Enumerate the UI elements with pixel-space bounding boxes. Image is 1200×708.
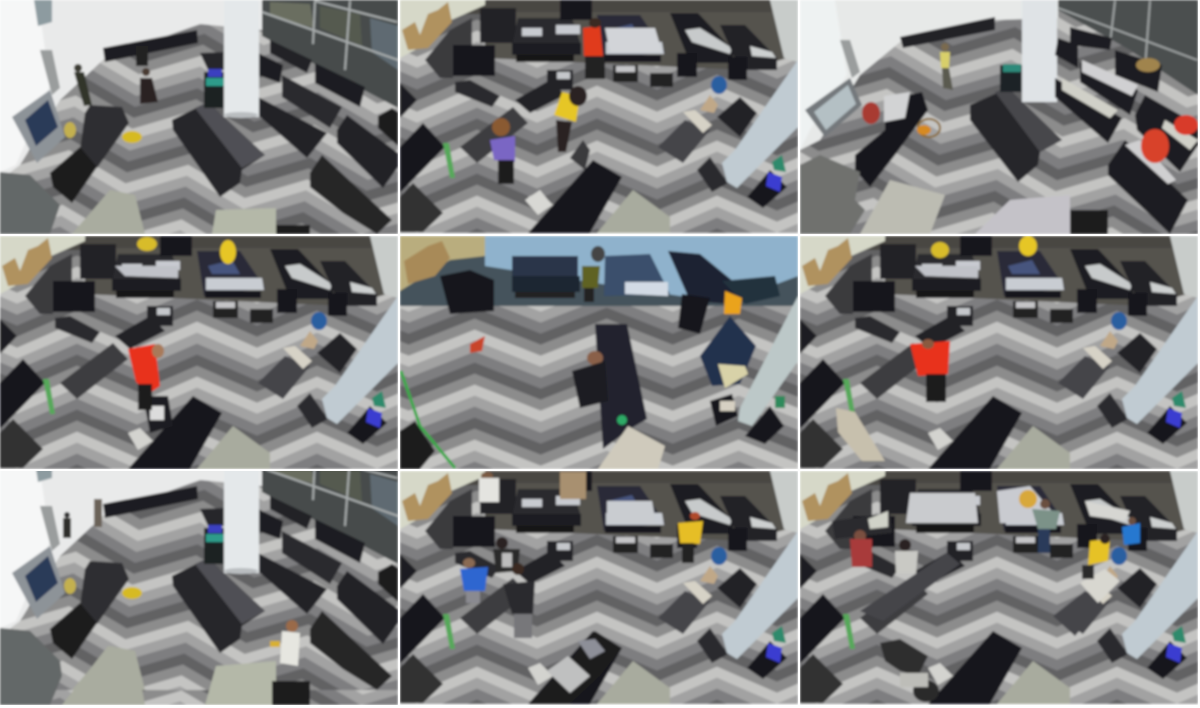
person: orange top at table <box>1019 490 1037 508</box>
panel: frame 3, west view with ballots on tables <box>800 0 1198 234</box>
person: grey-green top <box>1032 499 1060 553</box>
person: seated red top <box>862 102 880 124</box>
panel: frame 2, east view with two workers <box>400 0 798 234</box>
person: blue shirt <box>1122 517 1140 545</box>
person: yellow at left table <box>137 237 157 251</box>
person: striped top seated <box>895 539 918 573</box>
person: dark clothing by wall <box>74 64 92 106</box>
person: yellow at table <box>220 240 236 264</box>
panel: frame 7, west view with worker in white <box>0 471 398 705</box>
person: red jacket <box>128 344 164 410</box>
panel: frame 9, east view with ballots and several workers <box>800 471 1198 705</box>
person: yellow top <box>554 86 587 152</box>
person: yellow top with dark trousers <box>678 512 703 563</box>
person: red jacket <box>583 18 605 79</box>
panel: frame 5, centre wide view with blue windows <box>400 236 798 469</box>
person: black clothing with checked top <box>493 537 520 573</box>
person: yellow-green top <box>940 43 953 90</box>
person: yellow top <box>1082 534 1110 579</box>
person: by wall centre <box>94 499 102 527</box>
person: white shirt top <box>479 472 499 502</box>
person: yellow at table <box>1019 236 1037 256</box>
person: yellow at left table <box>931 242 949 258</box>
panel: frame 1, empty room west view <box>0 0 398 234</box>
person: white shirt at bottom <box>270 620 300 666</box>
panel: frame 6, worker in red <box>800 236 1198 469</box>
panel: frame 4, worker in red <box>0 236 398 469</box>
figures: tan coats <box>560 472 586 499</box>
panel: frame 8, east view with three workers <box>400 471 798 705</box>
person: olive shirt at table <box>582 246 605 302</box>
person: red jacket <box>910 339 950 402</box>
person: purple shirt <box>490 118 515 184</box>
person: red patterned top seated <box>850 530 872 567</box>
person: seated dark clothing <box>140 68 158 104</box>
person: light clothing seated <box>836 408 885 461</box>
person: large dark figure foreground <box>880 639 939 702</box>
person: wheeled cart operator <box>572 351 608 408</box>
person: by wall <box>63 512 71 538</box>
person: blue shirt <box>460 558 488 603</box>
person: dark shirt walking <box>503 563 535 638</box>
